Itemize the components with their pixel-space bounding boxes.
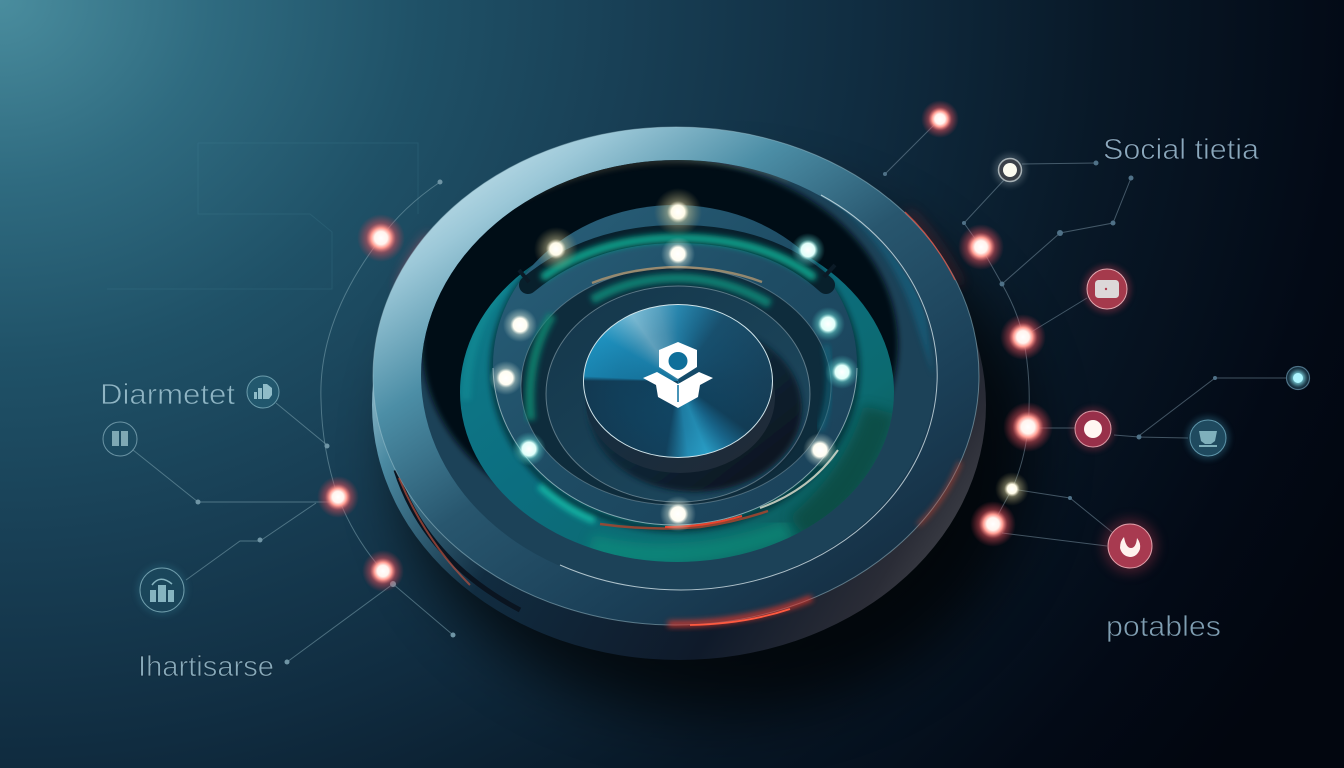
hub side wall: [585, 321, 775, 473]
right connector dots: [883, 160, 1217, 500]
edge glow: red: [402, 212, 960, 290]
rim red accents: [399, 212, 960, 625]
well dark crescent: [421, 160, 932, 482]
glowing red nodes: [317, 100, 1053, 592]
icon: red crescent badge: [1103, 519, 1157, 573]
disc top face: [373, 127, 979, 625]
small cream node: [995, 472, 1029, 506]
dark lower-left seam: [396, 470, 520, 610]
disc side wall: [372, 150, 986, 660]
stepped lamp ring: [493, 205, 857, 525]
well highlight line: [560, 195, 937, 590]
faint background panel outline: [107, 143, 418, 289]
icon: red dot badge: [1071, 407, 1115, 451]
left connector dots: [196, 180, 456, 664]
top green channel: [519, 234, 835, 285]
icon: buildings badge: [136, 564, 188, 616]
icon: cyan ring node: [1286, 366, 1310, 390]
icon: white shield emblem: [643, 342, 713, 408]
hub shadow well: [588, 324, 802, 492]
inner slate ring: [546, 286, 810, 502]
icon: blue laptop badge: [1186, 416, 1230, 460]
label: Diarmetet: Diarmetet: [100, 379, 235, 411]
label: potables: potables: [1106, 611, 1221, 643]
right connector lines: [885, 119, 1286, 546]
icon: white ring node: [994, 154, 1026, 186]
icon: chart badge: [247, 376, 279, 408]
ring lamps: [489, 188, 859, 532]
icon: red card badge: [1083, 265, 1131, 313]
label: Social tietia: Social tietia: [1103, 134, 1260, 166]
central hub disc: [583, 304, 773, 458]
central ring dial: [372, 127, 1030, 715]
drop shadow: [400, 185, 1030, 715]
teal ring: [460, 222, 894, 562]
left connector lines: [133, 182, 453, 662]
recessed well: [421, 160, 935, 590]
lamp ring inner groove: [521, 267, 831, 505]
teal ring glow accents: [466, 209, 880, 555]
label: Ihartisarse: Ihartisarse: [138, 651, 274, 683]
icon: book badge: [103, 422, 137, 456]
